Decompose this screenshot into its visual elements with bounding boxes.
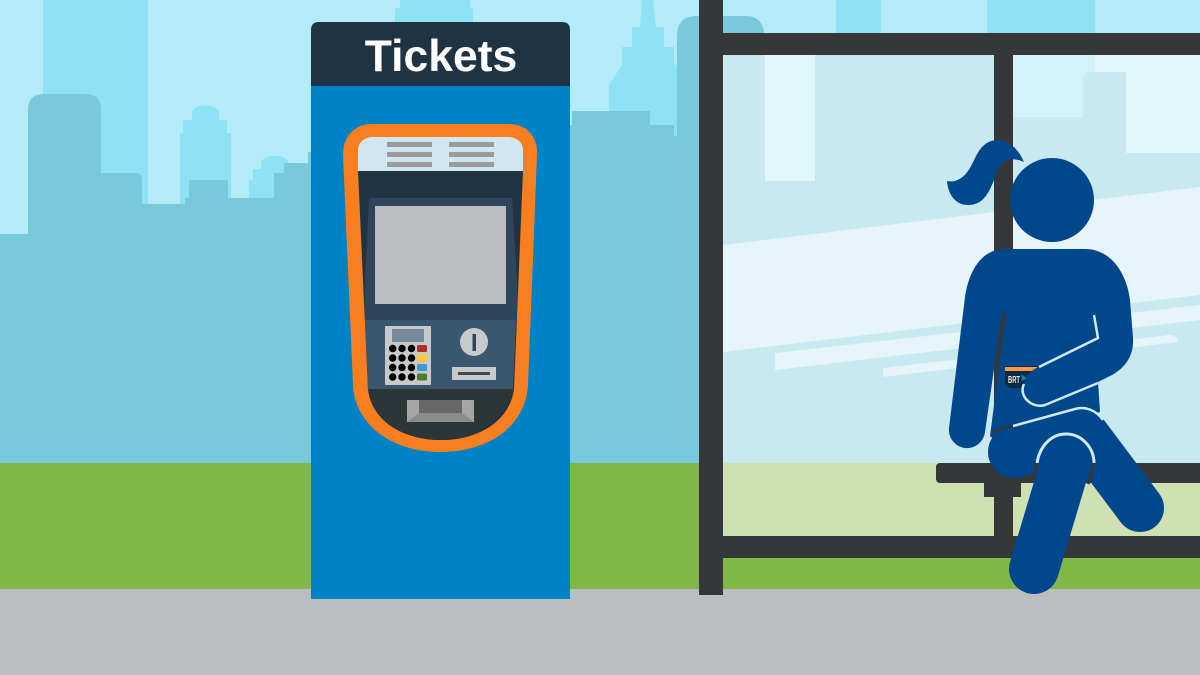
ticket machine (343, 124, 537, 452)
machine base (368, 389, 513, 440)
control panel (365, 320, 516, 389)
vent panel (358, 137, 523, 171)
far skyline (43, 0, 1095, 210)
knee outline (1035, 434, 1094, 484)
orange casing (343, 124, 537, 452)
heading: Tickets: Tickets (365, 32, 517, 81)
vents (387, 142, 494, 167)
front leg (1034, 462, 1066, 569)
bench (936, 463, 1200, 497)
ponytail (947, 140, 1024, 205)
pavement (0, 589, 1200, 675)
machine dark face (358, 171, 523, 440)
head (1010, 158, 1094, 242)
forearm outline (1023, 315, 1098, 406)
ticket dispenser (407, 400, 474, 422)
card reader (452, 367, 496, 380)
kiosk body (311, 80, 570, 599)
screen (375, 206, 506, 304)
seated person (947, 140, 1140, 569)
bent leg: shin (1086, 436, 1140, 508)
keypad (385, 326, 431, 385)
shelter glass (723, 55, 1200, 536)
kiosk header (311, 22, 570, 86)
sky background (0, 0, 1200, 470)
near skyline (0, 16, 764, 470)
ticket kiosk (311, 22, 570, 599)
bent leg: thigh (1014, 435, 1080, 452)
coin slot (460, 328, 488, 356)
BRT card: BRT (1008, 375, 1020, 386)
torso and left arm (949, 249, 1133, 448)
lap outline (993, 408, 1103, 433)
grass (0, 463, 1200, 593)
shelter frame (699, 0, 1200, 595)
hand (1024, 340, 1098, 406)
BRT card (1005, 366, 1039, 388)
screen surround (365, 198, 517, 320)
